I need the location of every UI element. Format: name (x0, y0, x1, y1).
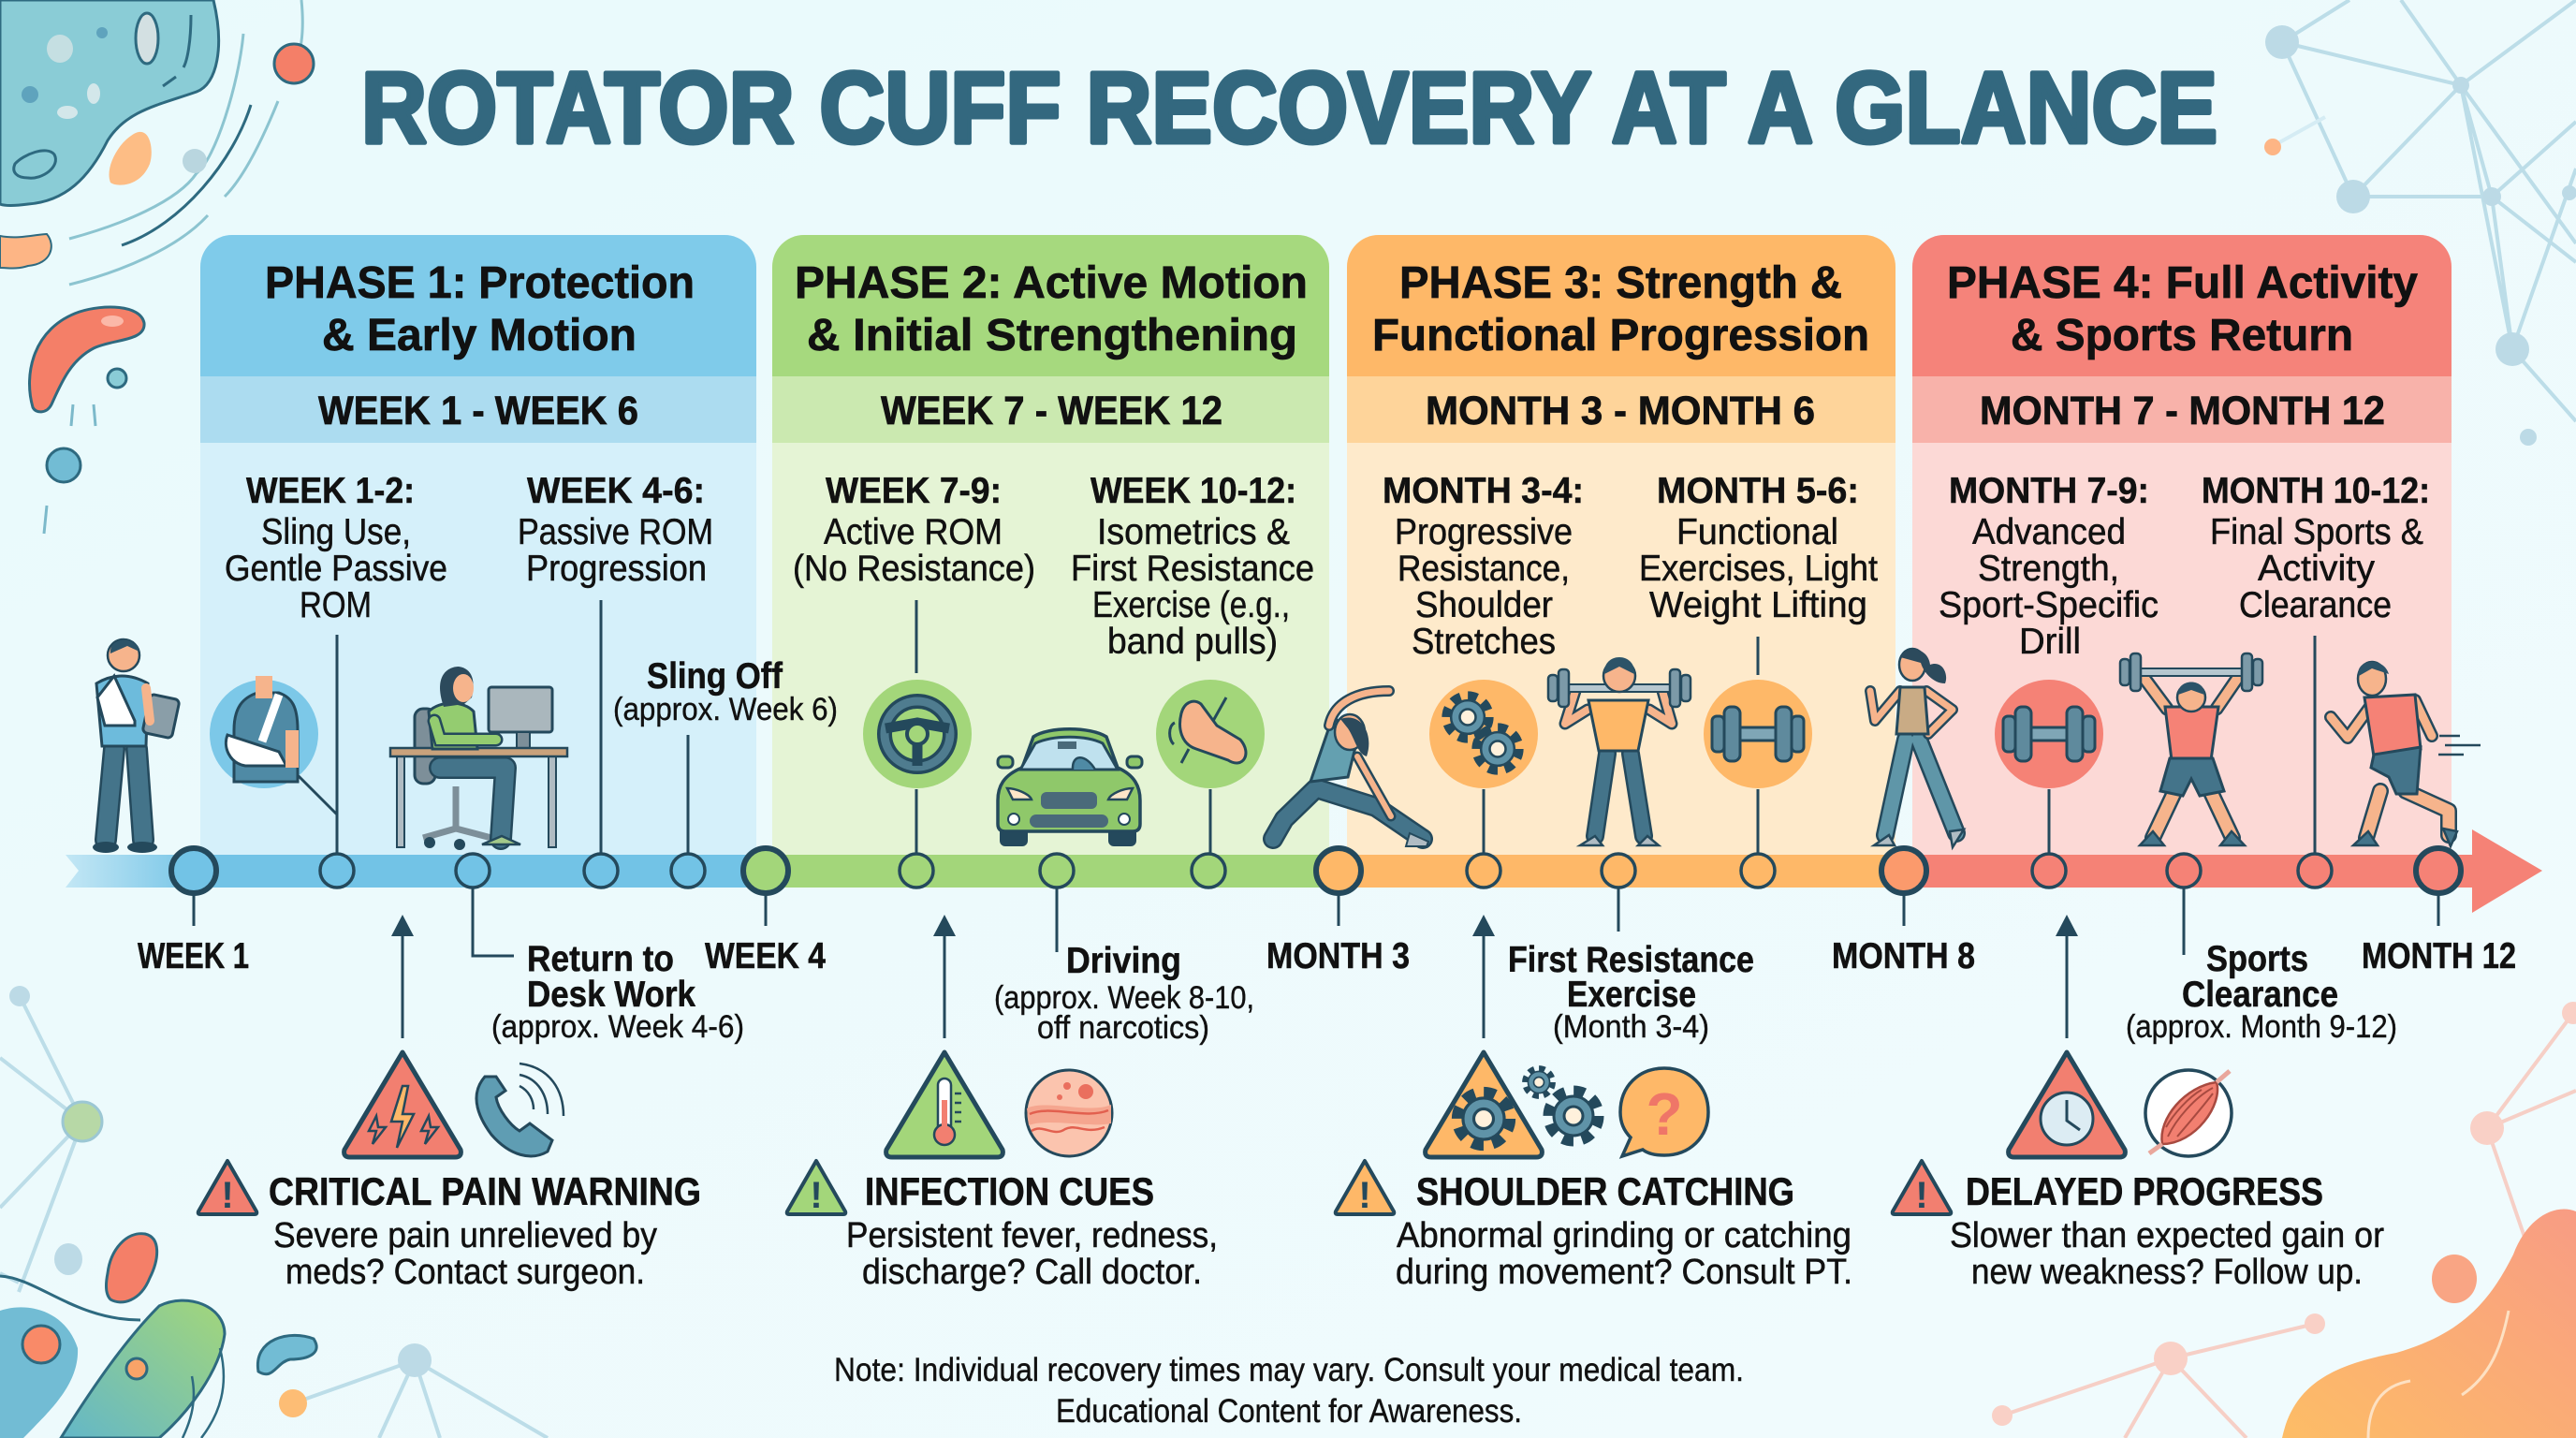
icon: gears circle (1429, 680, 1538, 788)
phase 1 period band (200, 376, 756, 443)
milestone text: week 10-12: band pulls) (1107, 622, 1278, 662)
milestone text: week 1-2: Sling Use, (261, 512, 411, 552)
milestone text: week 4-6: Passive ROM (518, 512, 713, 552)
milestone text: week 10-12 (1071, 471, 1314, 662)
callout: first resistance exercise: Exercise (1567, 975, 1696, 1015)
phase 4 period band (1912, 376, 2452, 443)
icon: phone with signal (476, 1064, 564, 1156)
warning text (1950, 1216, 2384, 1292)
callout: driving: off narcotics) (1037, 1010, 1209, 1046)
milestone text: month 5-6 (1639, 471, 1878, 625)
warning text: Severe pain unrelieved by (273, 1216, 657, 1255)
warning heading: INFECTION CUES (865, 1169, 1154, 1213)
phase 2 header band (772, 235, 1329, 376)
panel: phase 1 (200, 235, 756, 855)
decoration: left network (0, 986, 548, 1438)
milestone text: month 3-4 (1383, 471, 1584, 662)
phase 4 heading (1947, 258, 2418, 360)
icon: walking woman (1870, 649, 1964, 847)
phase 1 heading: & Early Motion (322, 311, 637, 360)
phase 2 heading (795, 258, 1308, 360)
phase 3 heading: Functional Progression (1372, 311, 1869, 360)
callout: first resistance exercise (1508, 940, 1754, 1045)
icon: small warning triangle (198, 1161, 256, 1216)
panel: phase 4 (1912, 235, 2452, 855)
icon: small warning triangle (1893, 1161, 1951, 1216)
milestone text: month 3-4: Stretches (1412, 622, 1556, 662)
icon: thermometer triangle (886, 1052, 1003, 1157)
warning text: meds? Contact surgeon. (285, 1253, 645, 1292)
callout: return to desk work: Return to (527, 939, 674, 979)
milestone text: week 1-2: ROM (300, 585, 372, 625)
connector lines (194, 600, 2438, 956)
decoration: top-right network (2264, 0, 2576, 446)
icon: arm sling circle (210, 676, 318, 788)
milestone text: month 5-6: MONTH 5-6: (1657, 471, 1859, 511)
arrows: warning to timeline (391, 915, 2078, 1038)
milestone text: month 7-9: Sport-Specific (1939, 585, 2159, 625)
icon: pain triangle (344, 1052, 461, 1157)
warning block: delayed progress (1893, 1052, 2384, 1292)
phase 4 heading: PHASE 4: Full Activity (1947, 258, 2418, 308)
warning text: during movement? Consult PT. (1396, 1253, 1852, 1292)
warning text: Persistent fever, redness, (846, 1216, 1218, 1255)
milestone text: week 7-9: Active ROM (824, 512, 1003, 552)
timeline labels: WEEK 1 (138, 936, 249, 976)
timeline labels: MONTH 12 (2362, 936, 2516, 976)
callout: first resistance exercise: (Month 3-4) (1553, 1009, 1709, 1045)
sling off callout: Sling Off (647, 656, 783, 697)
timeline nodes (171, 848, 2461, 893)
panel: phase 3 (1347, 235, 1895, 855)
icon: small warning triangle (1336, 1161, 1394, 1216)
timeline labels: WEEK 4 (705, 936, 826, 976)
milestone text: week 7-9: (No Resistance) (793, 549, 1035, 589)
icon: man with sling and tablet (93, 639, 180, 853)
timeline bar with arrow (66, 829, 2542, 913)
milestone text: week 7-9 (793, 471, 1035, 589)
callout: return to desk work (491, 939, 744, 1045)
sling off callout (613, 656, 838, 727)
milestone text: month 10-12: MONTH 10-12: (2202, 471, 2430, 511)
phase 4 period: MONTH 7 - MONTH 12 (1980, 389, 2385, 433)
phase 4 heading: & Sports Return (2011, 311, 2353, 360)
icon: woman at desk (390, 667, 567, 850)
footer note: Note: Individual recovery times may vary. Consult your medical team. (834, 1352, 1744, 1388)
milestone text: month 3-4: Progressive (1395, 512, 1573, 552)
phase 3 header band (1347, 235, 1895, 376)
callout: sports clearance (2126, 939, 2397, 1045)
icon: small warning triangle: ! (1358, 1175, 1371, 1216)
panel: phase 2 (772, 235, 1329, 855)
milestone text: week 10-12: Exercise (e.g., (1092, 585, 1290, 625)
icon: dumbbell circle orange (1704, 680, 1812, 788)
timeline labels: MONTH 3 (1266, 936, 1410, 976)
sling off callout: (approx. Week 6) (613, 692, 838, 727)
icon: hand with band (1156, 680, 1265, 788)
milestone text: week 10-12: Isometrics & (1097, 512, 1290, 552)
phase 1 heading (265, 258, 695, 360)
milestone text: week 1-2 (225, 471, 447, 625)
milestone text: week 4-6: Progression (526, 549, 707, 589)
warning heading: CRITICAL PAIN WARNING (269, 1169, 701, 1213)
icon: gear triangle (1426, 1052, 1542, 1157)
warning text (846, 1216, 1218, 1292)
milestone text: week 10-12: WEEK 10-12: (1090, 471, 1296, 511)
milestone text: month 7-9 (1939, 471, 2159, 662)
milestone text: week 4-6: WEEK 4-6: (527, 471, 705, 511)
milestone text: week 1-2: Gentle Passive (225, 549, 447, 589)
milestone text: month 7-9: Advanced (1972, 512, 2126, 552)
milestone text: week 4-6 (518, 471, 713, 589)
callout: sports clearance: (approx. Month 9-12) (2126, 1009, 2397, 1045)
decoration: bottom-right blob and network (1992, 1002, 2576, 1438)
phase 2 period: WEEK 7 - WEEK 12 (881, 389, 1222, 433)
milestone text: month 10-12 (2202, 471, 2430, 625)
decoration: top-left biological blobs (0, 0, 314, 534)
icon: small warning triangle: ! (221, 1175, 234, 1216)
callout: return to desk work: Desk Work (527, 975, 695, 1015)
warning text (1396, 1216, 1852, 1292)
timeline labels: MONTH 8 (1832, 936, 1975, 976)
milestone text: month 3-4: MONTH 3-4: (1383, 471, 1584, 511)
icon: small warning triangle: ! (1915, 1175, 1928, 1216)
icon: stretching woman (1273, 691, 1428, 846)
icon: dumbbell circle red (1995, 680, 2103, 788)
icon: steering wheel (863, 680, 972, 788)
phase 3 period: MONTH 3 - MONTH 6 (1426, 389, 1815, 433)
icon: runner (2331, 662, 2481, 846)
warning block: shoulder catching (1336, 1052, 1852, 1292)
warning text: Slower than expected gain or (1950, 1216, 2384, 1255)
milestone text: month 7-9: Drill (2019, 622, 2081, 662)
icon: clock triangle (2009, 1052, 2125, 1157)
phase 3 heading: PHASE 3: Strength & (1399, 258, 1842, 308)
icon: small warning triangle: ! (810, 1175, 823, 1216)
phase 4 header band (1912, 235, 2452, 376)
phase 2 heading: PHASE 2: Active Motion (795, 258, 1308, 308)
phase 2 period band (772, 376, 1329, 443)
phase 3 heading (1372, 258, 1869, 360)
icon: man lifting barbell (1548, 657, 1690, 845)
callout: driving: (approx. Week 8-10, (994, 980, 1254, 1016)
title: ROTATOR CUFF RECOVERY AT A GLANCE (361, 51, 2217, 164)
milestone text: month 10-12: Clearance (2239, 585, 2392, 625)
footer note (834, 1352, 1744, 1430)
phase 1 header band (200, 235, 756, 376)
warning block: infection cues (787, 1052, 1218, 1292)
milestone text: month 10-12: Final Sports & (2210, 512, 2423, 552)
warning block: critical pain (198, 1052, 701, 1292)
milestone text: month 5-6: Exercises, Light (1639, 549, 1878, 589)
timeline labels (138, 936, 2516, 976)
milestone text: month 3-4: Shoulder (1415, 585, 1553, 625)
milestone text: month 5-6: Functional (1676, 512, 1838, 552)
milestone text: month 5-6: Weight Lifting (1649, 585, 1867, 625)
footer note: Educational Content for Awareness. (1056, 1393, 1522, 1430)
warning text: discharge? Call doctor. (862, 1253, 1202, 1292)
icon: question speech bubble: ? (1646, 1080, 1683, 1148)
callout: driving (994, 941, 1254, 1046)
decoration: bottom-left blobs (0, 1234, 316, 1438)
warning text: Abnormal grinding or catching (1397, 1216, 1852, 1255)
icon: skin inflammation (1026, 1070, 1112, 1156)
milestone text: month 10-12: Activity (2258, 549, 2376, 589)
callout: driving: Driving (1066, 941, 1181, 981)
milestone text: month 7-9: MONTH 7-9: (1949, 471, 2149, 511)
phase 1 period: WEEK 1 - WEEK 6 (318, 389, 638, 433)
callout: return to desk work: (approx. Week 4-6) (491, 1009, 744, 1045)
milestone text: week 1-2: WEEK 1-2: (246, 471, 415, 511)
phase 1 heading: PHASE 1: Protection (265, 258, 695, 308)
phase 2 heading: & Initial Strengthening (807, 311, 1297, 360)
icon: gears (1526, 1069, 1597, 1139)
icon: green car (998, 729, 1142, 846)
icon: man overhead press (2120, 653, 2262, 845)
milestone text: week 7-9: WEEK 7-9: (826, 471, 1002, 511)
callout: sports clearance: Clearance (2182, 975, 2338, 1015)
icon: small warning triangle (787, 1161, 845, 1216)
milestone text: month 7-9: Strength, (1978, 549, 2119, 589)
callout: first resistance exercise: First Resistance (1508, 940, 1754, 980)
warning text (273, 1216, 657, 1292)
icon: muscle circle (2145, 1070, 2232, 1156)
icon: question speech bubble (1620, 1068, 1708, 1156)
callout: sports clearance: Sports (2206, 939, 2308, 979)
milestone text: week 10-12: First Resistance (1071, 549, 1314, 589)
milestone text: month 3-4: Resistance, (1398, 549, 1570, 589)
phase 3 period band (1347, 376, 1895, 443)
warning heading: DELAYED PROGRESS (1966, 1169, 2323, 1213)
warning heading: SHOULDER CATCHING (1416, 1169, 1794, 1213)
warning text: new weakness? Follow up. (1971, 1253, 2363, 1292)
